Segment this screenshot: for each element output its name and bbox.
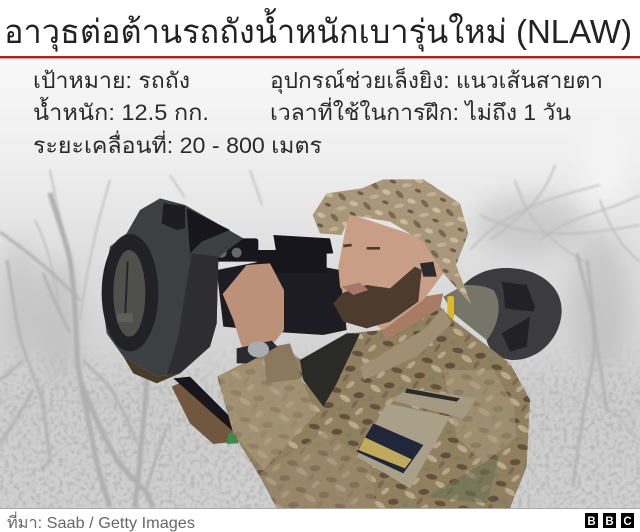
neck [380,293,443,340]
hand and watch [223,263,284,363]
shoulder patch with Ukrainian flag [357,388,477,488]
spec: target: เป้าหมาย: รถถัง [33,68,190,93]
title: (NLAW) [516,13,632,50]
BBC logo: C [623,516,632,528]
launcher head [102,198,243,383]
boonie hat [313,179,472,305]
face and beard [333,213,443,330]
spec: training time: เวลาที่ใช้ในการฝึก: ไม่ถึง 1 วัน [270,97,571,125]
white header band [0,0,640,57]
launcher body tube [217,258,347,335]
title [4,8,632,52]
launcher rear tube and flare [443,268,562,360]
BBC logo [585,513,634,528]
BBC logo: B [587,516,596,528]
spec: sighting aid: อุปกรณ์ช่วยเล็งยิง: แนวเส้นสายตา [270,66,603,94]
specification text block [33,66,603,158]
soldier with NLAW launcher [102,179,562,508]
brown pouch under launcher [172,378,236,444]
source credit: ที่มา: Saab / Getty Images [7,511,195,532]
spec: weight: น้ำหนัก: 12.5 กก. [33,97,209,125]
green tag [227,432,238,444]
spec: range: ระยะเคลื่อนที่: 20 - 800 เมตร [33,130,322,158]
jacket [217,307,530,508]
title: อาวุธต่อต้านรถถังน้ำหนักเบารุ่นใหม่ [4,8,507,52]
red rule under title [0,56,640,58]
footer band [0,508,640,532]
launcher optics [202,235,333,273]
BBC logo: B [605,516,614,528]
black launcher strap [173,377,237,432]
